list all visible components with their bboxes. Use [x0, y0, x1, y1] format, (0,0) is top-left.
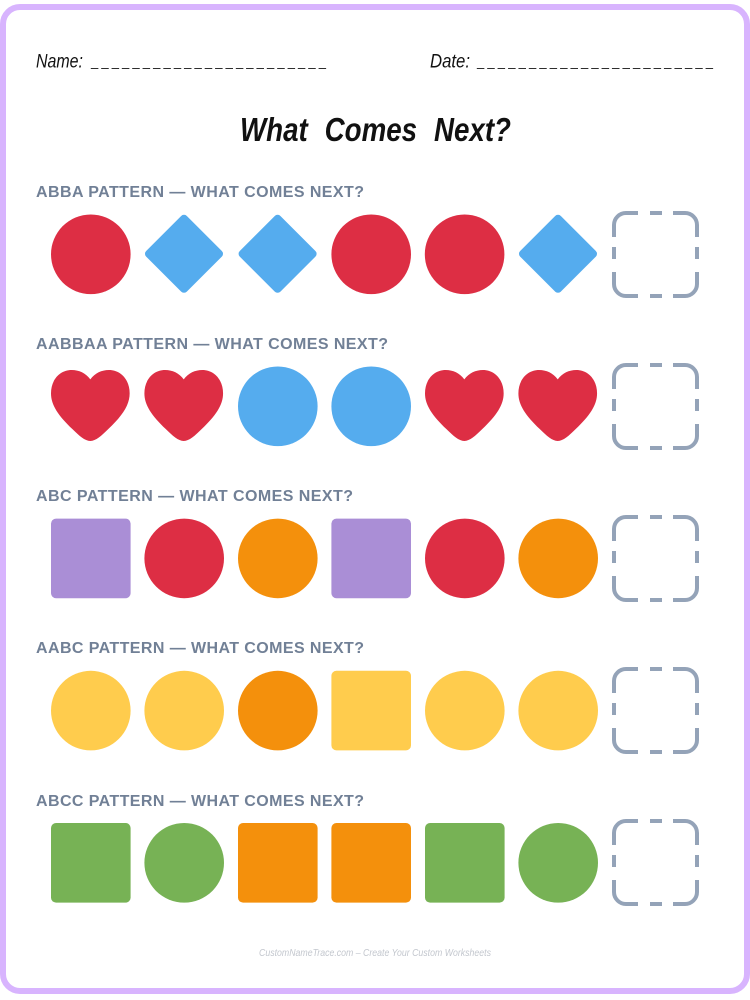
shape: yellow circle	[518, 671, 598, 750]
date field: _______________________	[476, 54, 714, 70]
shape: orange circle	[238, 671, 318, 750]
heading: ABCC pattern: ABCC PATTERN — WHAT COMES NEXT?	[36, 793, 364, 810]
shape: blue diamond	[143, 213, 225, 294]
shape: red heart	[51, 370, 130, 441]
shape: red heart	[144, 370, 223, 441]
heading: ABBA pattern: ABBA PATTERN — WHAT COMES NEXT?	[36, 184, 364, 201]
shape: green square	[425, 823, 505, 903]
shape: purple square	[331, 519, 411, 598]
heading: ABC pattern: ABC PATTERN — WHAT COMES NEXT?	[36, 488, 353, 505]
panel: AABBAA pattern	[36, 336, 697, 448]
name field: _______________________	[90, 54, 327, 70]
shape: yellow circle	[51, 671, 131, 750]
shape: green circle	[144, 823, 224, 903]
heading: AABBAA pattern: AABBAA PATTERN — WHAT COMES NEXT?	[36, 336, 388, 353]
shape: blue circle	[331, 366, 411, 446]
shape: red heart	[425, 370, 504, 441]
shape: blue circle	[238, 366, 318, 446]
panel: ABC pattern	[36, 488, 697, 600]
empty answer box	[614, 365, 697, 448]
shape: yellow circle	[425, 671, 505, 750]
name field: Name:	[36, 52, 83, 72]
panel: AABC pattern	[36, 640, 697, 752]
empty answer box	[614, 213, 697, 296]
shape: orange circle	[518, 519, 598, 598]
footer: CustomNameTrace.com – Create Your Custom Worksheets	[259, 948, 491, 959]
name field	[36, 52, 327, 72]
shape: red heart	[518, 370, 597, 441]
shape: green circle	[518, 823, 598, 903]
heading: AABC pattern: AABC PATTERN — WHAT COMES NEXT?	[36, 640, 364, 657]
empty answer box	[614, 669, 697, 752]
shape: blue diamond	[237, 213, 318, 294]
panel: ABCC pattern	[36, 793, 697, 904]
panel: ABBA pattern	[36, 184, 697, 296]
shape: red circle	[425, 214, 504, 294]
shape: red circle	[51, 214, 131, 294]
date field: Date:	[430, 52, 470, 72]
shape: red circle	[425, 519, 505, 598]
shape: blue diamond	[517, 213, 599, 294]
shape: red circle	[331, 214, 411, 294]
shape: purple square	[51, 519, 131, 598]
shape: orange circle	[238, 519, 318, 598]
shape: orange square	[238, 823, 318, 903]
empty answer box	[614, 517, 697, 600]
shape: yellow square	[331, 671, 411, 750]
date field	[430, 52, 714, 72]
shape: green square	[51, 823, 131, 903]
title: What Comes Next?	[240, 111, 511, 148]
shape: red circle	[144, 519, 224, 598]
shape: orange square	[331, 823, 411, 903]
empty answer box	[614, 821, 697, 904]
shape: yellow circle	[144, 671, 224, 750]
